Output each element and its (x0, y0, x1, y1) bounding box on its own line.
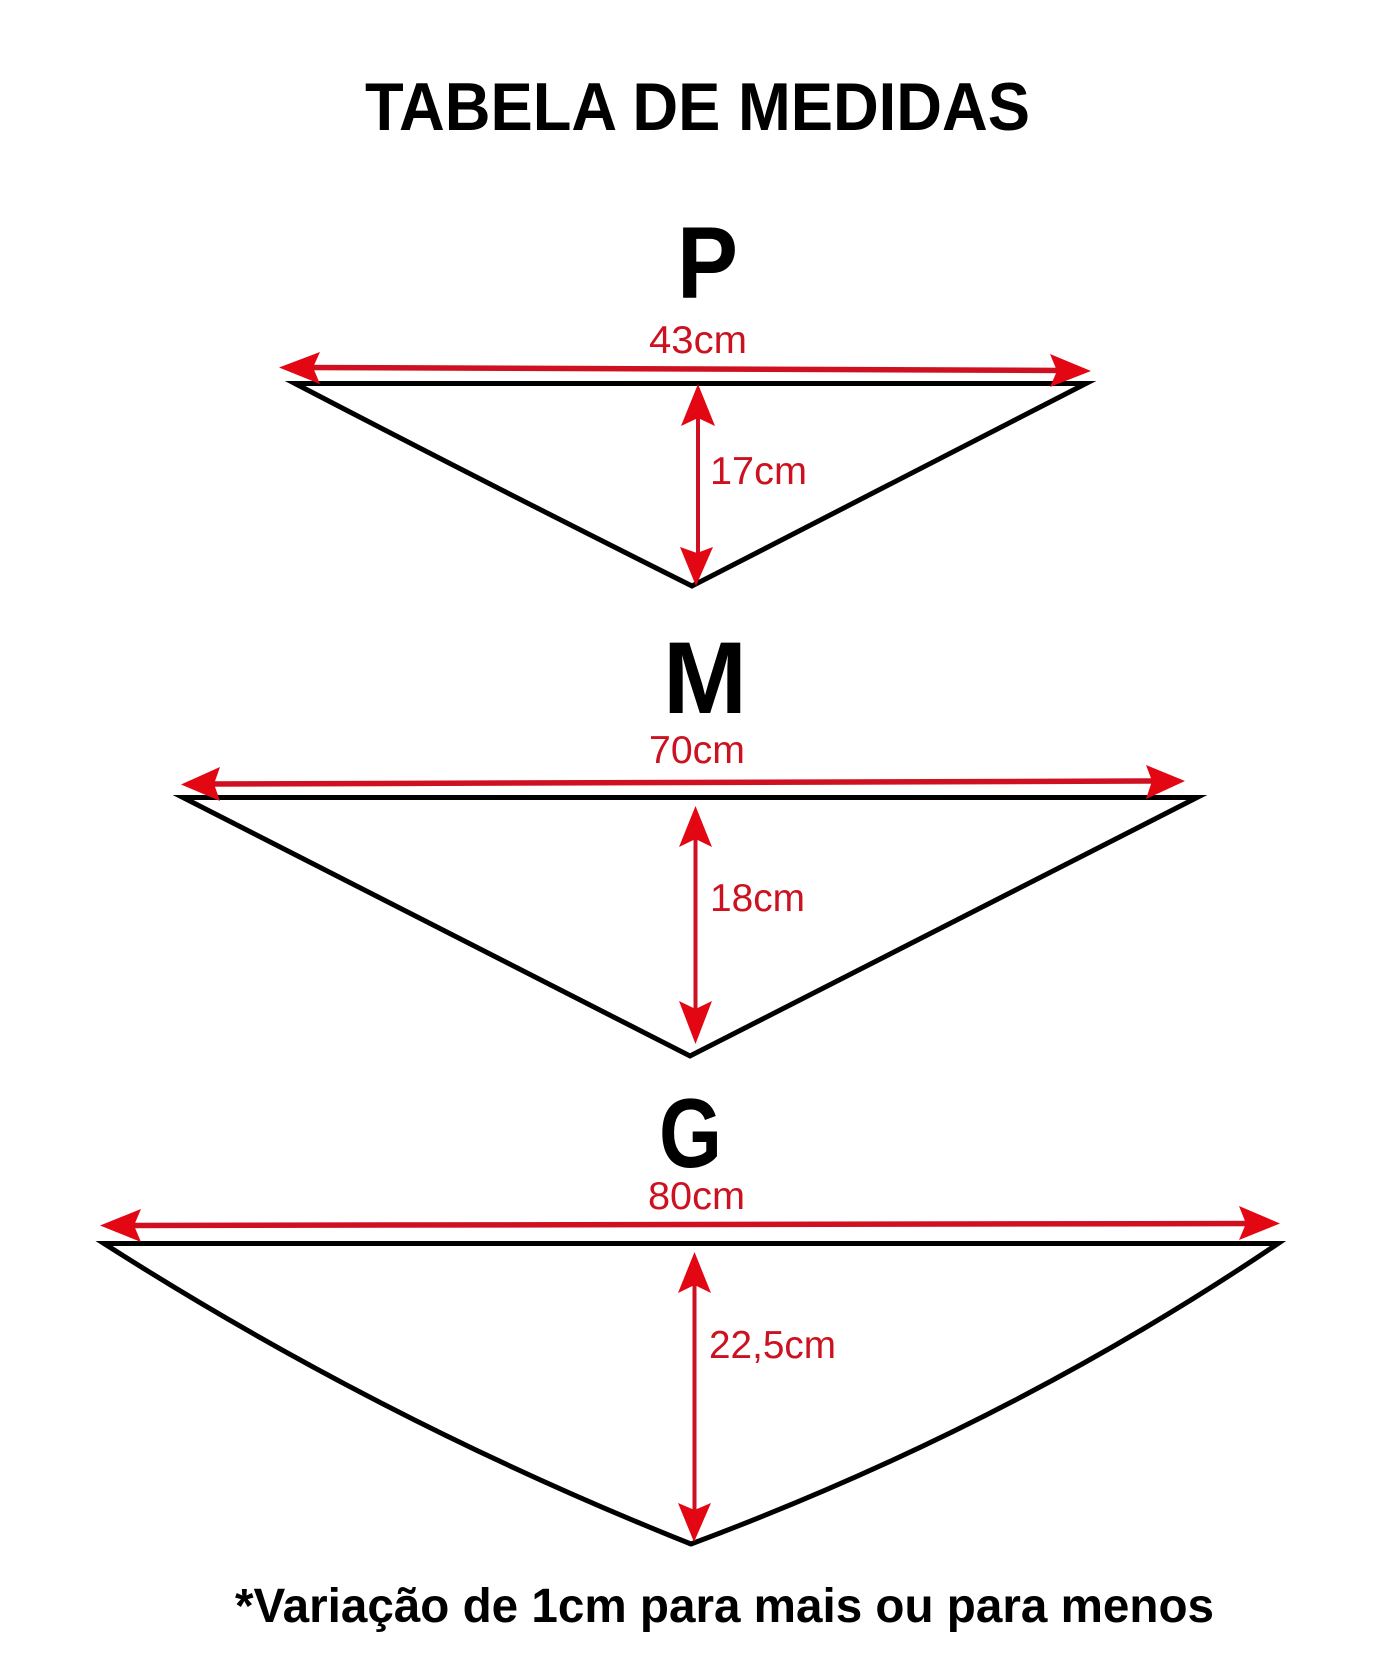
heading: M: M (663, 621, 747, 735)
height label: 18cm: 18cm (710, 877, 805, 920)
height arrow M (679, 806, 712, 1044)
height label: 22,5cm: 22,5cm (709, 1324, 836, 1367)
panel: size G (100, 1078, 1280, 1544)
width arrow M (181, 765, 1185, 801)
triangle outline G (104, 1244, 1278, 1544)
width label: 43cm: 43cm (649, 319, 747, 362)
width arrow P (279, 352, 1091, 387)
width label: 80cm: 80cm (648, 1175, 745, 1218)
triangle outline P (295, 384, 1086, 586)
footnote: *Variação de 1cm para mais ou para menos (235, 1580, 1214, 1633)
width arrow G (100, 1206, 1280, 1242)
width label: 70cm: 70cm (649, 729, 745, 772)
panel: size P (279, 206, 1091, 586)
heading: P: P (677, 206, 738, 320)
panel: size M (181, 621, 1197, 1056)
heading: G: G (659, 1078, 722, 1188)
height arrow G (678, 1252, 711, 1542)
triangle outline M (183, 798, 1197, 1056)
height arrow P (680, 384, 715, 586)
title: TABELA DE MEDIDAS (365, 69, 1030, 145)
height label: 17cm: 17cm (710, 450, 807, 493)
